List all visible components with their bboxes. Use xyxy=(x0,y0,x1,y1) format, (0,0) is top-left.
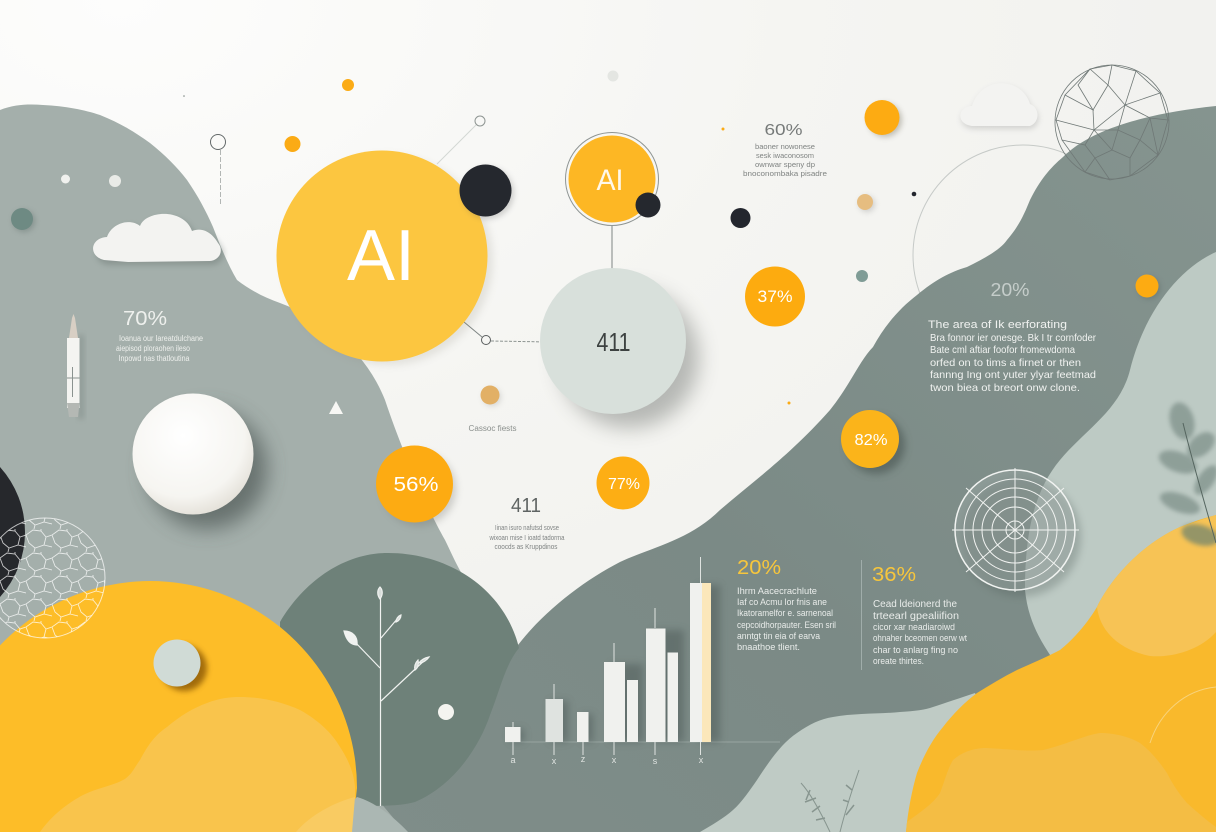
text block: 411: wixoan mise I ioatd tadorma xyxy=(489,533,565,542)
text block: 411: Iinan isuro nafutsd sovse xyxy=(495,523,559,532)
icon: small left dots xyxy=(11,174,121,232)
bar chart xyxy=(505,557,780,766)
small AI circle: AI xyxy=(596,164,624,197)
lighter yellow blob, bottom right xyxy=(906,733,1216,832)
text block: yellow 20 percent: Ihrm Aacecrachlute xyxy=(737,586,817,596)
faint dot xyxy=(608,70,618,82)
text block: left 70 percent xyxy=(116,308,203,363)
icon: tan bead xyxy=(480,386,501,406)
badge: 37 percent: 37% xyxy=(758,287,792,306)
text block: 20 percent paragraph xyxy=(928,280,1096,394)
icon: radar web xyxy=(952,468,1081,597)
text block: 20 percent paragraph: Bate cml aftiar foofor fromewdoma xyxy=(930,344,1075,356)
text block: yellow 20 percent: cepcoidhorpauter. Esen sril xyxy=(737,620,836,630)
text block: yellow 36 percent: 36% xyxy=(872,564,916,586)
icon: dark textured half circle xyxy=(0,467,25,597)
icon: fern, right edge xyxy=(1156,400,1216,550)
icon: pencil xyxy=(67,314,84,419)
text block: 20 percent paragraph: 20% xyxy=(990,280,1030,300)
text block: yellow 20 percent: anntgt tin eia of earva xyxy=(737,631,820,641)
grey 411 circle: 411 xyxy=(596,327,630,357)
panel: bottom pale wave xyxy=(700,693,1000,832)
badge: 37 percent xyxy=(745,266,805,326)
big AI circle: AI xyxy=(347,216,415,296)
icon: white triangle xyxy=(329,401,343,414)
text block: 411: 411 xyxy=(511,495,541,517)
text block: 20 percent paragraph: fannng Ing ont yuter ylyar feetmad xyxy=(930,369,1096,381)
small dots, right of centre xyxy=(730,192,916,282)
icon: pale button with shadow xyxy=(154,640,207,691)
badge: 82 percent: 82% xyxy=(854,432,888,449)
badge: 77 percent: 77% xyxy=(608,476,640,493)
text block: yellow 36 percent xyxy=(872,564,967,667)
text block: 60 percent: bnoconombaka pisadre xyxy=(743,169,827,178)
panel: left grey wave xyxy=(0,105,470,832)
text block: 60 percent: ownwar speny dp xyxy=(755,160,815,169)
big AI circle xyxy=(276,150,493,365)
icon: right cloud xyxy=(960,83,1038,129)
text block: 20 percent paragraph: The area of Ik eerforating xyxy=(928,319,1067,331)
text block: yellow 20 percent: Iaf co Acmu lor fnis ane xyxy=(737,597,827,607)
text block: yellow 20 percent: 20% xyxy=(737,557,781,579)
whiskers xyxy=(513,557,700,755)
icon: dark textured circle xyxy=(460,164,514,219)
lighter yellow circle, right xyxy=(1097,515,1216,656)
icon: orange dot on wave xyxy=(1136,274,1160,299)
icon: white sphere xyxy=(132,394,267,529)
bar shadows xyxy=(510,585,720,742)
caption: cassoc fiests: Cassoc fiests xyxy=(468,424,516,433)
axis labels: x xyxy=(552,756,557,766)
pale blob, bottom centre left xyxy=(340,797,408,832)
badge: 77 percent xyxy=(596,456,650,510)
badge: 56 percent xyxy=(376,446,456,526)
text block: yellow 36 percent: Cead ldeionerd the xyxy=(873,599,957,610)
text block: yellow 20 percent: Ikatoramelfor e. sarnenoal xyxy=(737,608,833,618)
text block: left 70 percent: aiepisod ploraohen ileso xyxy=(116,344,190,353)
text block: yellow 36 percent: ohnaher bceomen oerw wt xyxy=(873,633,967,644)
text block: left 70 percent: Ioanua our Iareatdulchane xyxy=(119,334,203,343)
lightest yellow sliver, bottom left xyxy=(296,797,355,832)
text block: 411: coocds as Kruppdinos xyxy=(494,542,558,551)
panel: right pale blob xyxy=(1025,252,1216,700)
icon: fern, bottom xyxy=(801,770,859,832)
text block: 60 percent: 60% xyxy=(764,122,802,139)
panel: lower right yellow blob xyxy=(906,515,1216,832)
text block: yellow 36 percent: trteearl gpealiifion xyxy=(873,611,959,622)
icon: orange disc xyxy=(864,100,902,137)
text block: yellow 36 percent: char to anlarg fing no xyxy=(873,645,958,656)
thin arc on lower right yellow xyxy=(1150,687,1216,743)
icon: white mesh sphere xyxy=(0,518,105,638)
text block: 60 percent: baoner nowonese xyxy=(755,142,815,151)
axis labels: x xyxy=(699,755,704,765)
text block: 60 percent: sesk iwaconosom xyxy=(756,151,814,160)
icon: left cloud xyxy=(93,214,224,265)
axis labels: a xyxy=(510,755,516,765)
panel: dark green rounded shape xyxy=(280,553,519,806)
text block: yellow 20 percent xyxy=(737,557,836,652)
grey 411 circle xyxy=(540,268,699,428)
panel: central dark grey wave xyxy=(370,106,1216,832)
small orange dots xyxy=(183,79,790,404)
text block: 20 percent paragraph: twon biea ot breort onw clone. xyxy=(930,382,1080,394)
text block: 60 percent xyxy=(743,122,827,178)
axis labels: z xyxy=(581,754,586,764)
panel: big lower left yellow circle xyxy=(0,581,357,832)
badge: 56 percent: 56% xyxy=(394,474,439,496)
thin arc circle xyxy=(913,145,1133,365)
text block: 20 percent paragraph: orfed on to tims a firnet or then xyxy=(930,357,1081,369)
text block: left 70 percent: Inpowd nas thatloutina xyxy=(118,354,190,363)
text block: yellow 36 percent: oreate thirtes. xyxy=(873,656,924,667)
small AI circle xyxy=(566,132,660,226)
badge: 82 percent xyxy=(841,410,905,474)
axis labels xyxy=(510,754,704,766)
icon: plant xyxy=(344,587,429,806)
connector lines and rings xyxy=(210,116,612,344)
lighter yellow blob, bottom left xyxy=(40,697,355,832)
text block: 411 xyxy=(489,495,565,551)
icon: wireframe globe xyxy=(1055,65,1169,180)
text block: yellow 20 percent: bnaathoe tlient. xyxy=(737,642,800,652)
axis labels: x xyxy=(612,755,617,765)
vertical divider xyxy=(860,560,862,670)
bars xyxy=(505,583,711,742)
text block: yellow 36 percent: cicor xar neadiaroiwd xyxy=(873,622,955,633)
text block: left 70 percent: 70% xyxy=(123,308,167,330)
icon: small white dot xyxy=(438,704,454,720)
chart baseline xyxy=(505,741,780,743)
text block: 20 percent paragraph: Bra fonnor ier onesge. Bk I tr cornfoder xyxy=(930,332,1096,344)
axis labels: s xyxy=(653,756,658,766)
